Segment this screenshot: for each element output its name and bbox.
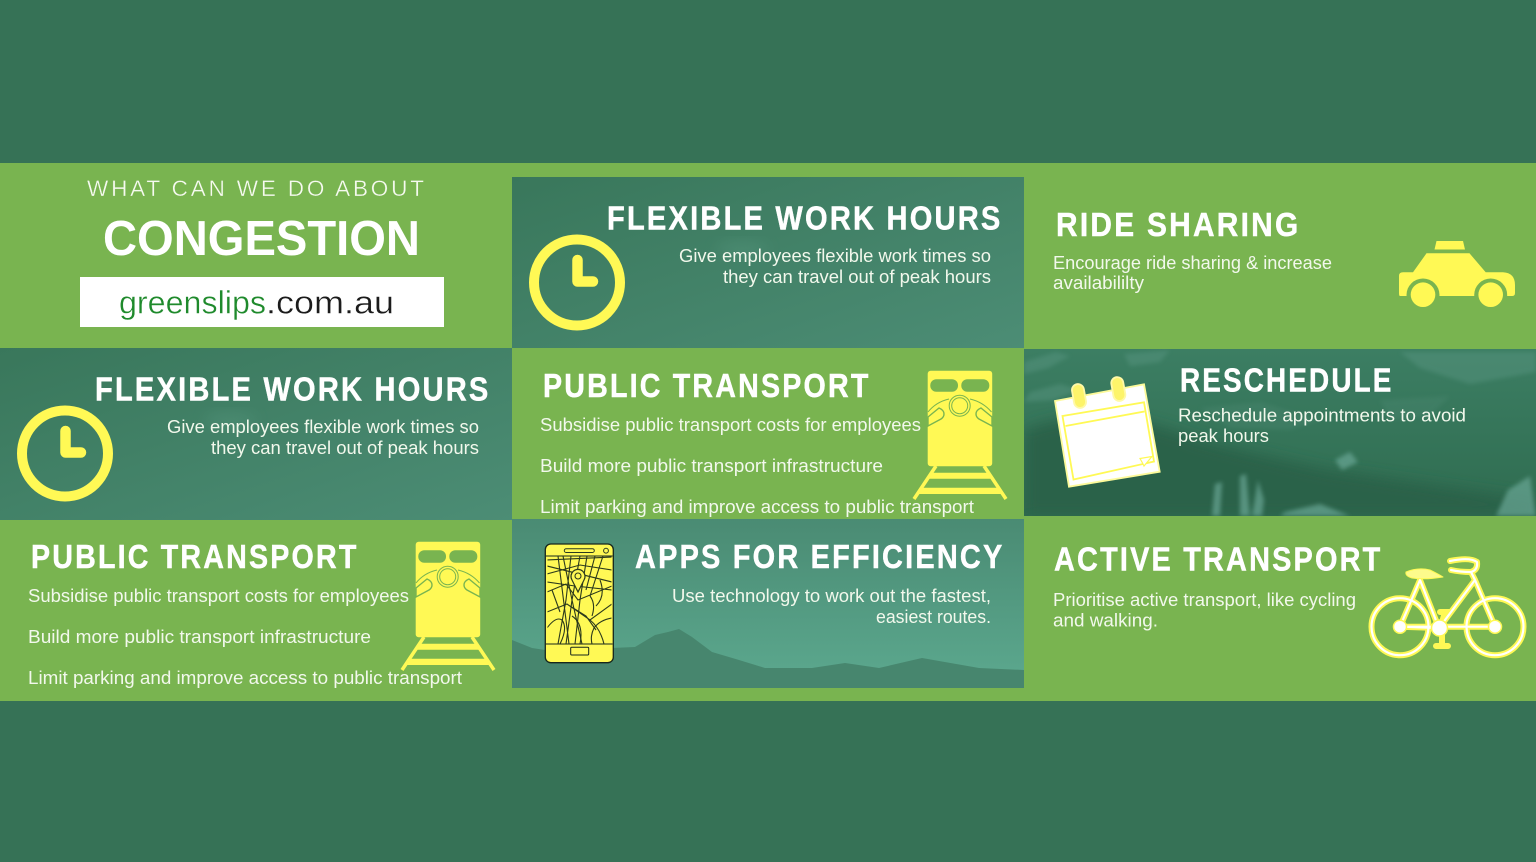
body text bbox=[1053, 253, 1332, 293]
body text: peak hours bbox=[1178, 426, 1269, 446]
icon: calendar bbox=[1055, 376, 1160, 487]
panel: public transport (left) bbox=[28, 538, 494, 688]
logo box bbox=[80, 277, 444, 327]
body text: Encourage ride sharing & increase bbox=[1053, 253, 1332, 273]
body text: easiest routes. bbox=[876, 607, 991, 627]
body text: Build more public transport infrastructure bbox=[28, 627, 371, 647]
heading: RIDE SHARING bbox=[1056, 206, 1300, 243]
panel: apps for efficiency bbox=[512, 519, 1024, 688]
heading: RESCHEDULE bbox=[1180, 362, 1394, 398]
logo box: greenslips bbox=[119, 284, 266, 320]
body text: Reschedule appointments to avoid bbox=[1178, 406, 1466, 426]
body text bbox=[672, 586, 991, 627]
body text: Subsidise public transport costs for employees bbox=[540, 415, 921, 435]
heading: FLEXIBLE WORK HOURS bbox=[607, 200, 1002, 236]
body text: and walking. bbox=[1053, 610, 1158, 630]
heading: FLEXIBLE WORK HOURS bbox=[95, 370, 490, 408]
icon: train bbox=[914, 371, 1006, 499]
panel: public transport (centre) bbox=[540, 367, 1006, 517]
body text bbox=[167, 417, 479, 458]
icon: phone with map bbox=[545, 544, 613, 663]
panel: active transport bbox=[1053, 540, 1524, 655]
heading: APPS FOR EFFICIENCY bbox=[635, 538, 1004, 575]
map pin bbox=[571, 569, 585, 592]
panel: flexible work hours (left) bbox=[0, 348, 512, 520]
panel: ride sharing bbox=[1053, 206, 1515, 312]
body text: they can travel out of peak hours bbox=[211, 438, 479, 458]
icon: clock bbox=[22, 410, 108, 496]
icon: train bbox=[402, 542, 494, 670]
body text: Prioritise active transport, like cycling bbox=[1053, 590, 1356, 610]
body text: Limit parking and improve access to public transport bbox=[28, 668, 462, 688]
heading: congestion: CONGESTION bbox=[103, 212, 420, 266]
body text bbox=[679, 246, 991, 287]
heading: ACTIVE TRANSPORT bbox=[1054, 540, 1382, 578]
mountains bbox=[512, 629, 1024, 688]
body text bbox=[540, 415, 974, 517]
body text: Limit parking and improve access to public transport bbox=[540, 497, 974, 517]
panel: flexible work hours (centre) bbox=[512, 177, 1024, 348]
green band bbox=[0, 163, 1536, 701]
body text: Subsidise public transport costs for employees bbox=[28, 586, 409, 606]
heading: PUBLIC TRANSPORT bbox=[543, 367, 870, 404]
body text: Use technology to work out the fastest, bbox=[672, 586, 991, 606]
body text bbox=[1053, 590, 1356, 630]
body text: Give employees flexible work times so bbox=[167, 417, 479, 437]
body text: Give employees flexible work times so bbox=[679, 246, 991, 266]
body text bbox=[28, 586, 462, 688]
panel: title bbox=[80, 176, 444, 327]
body text: Build more public transport infrastructure bbox=[540, 456, 883, 476]
panel: reschedule bbox=[1024, 349, 1536, 516]
body text bbox=[1178, 406, 1466, 446]
photo texture bbox=[1024, 350, 1536, 516]
icon: bicycle bbox=[1372, 559, 1524, 655]
icon: car bbox=[1399, 241, 1515, 312]
body text: they can travel out of peak hours bbox=[723, 267, 991, 287]
logo box: .com.au bbox=[266, 284, 394, 320]
heading: PUBLIC TRANSPORT bbox=[31, 538, 358, 575]
heading: what can we do about: WHAT CAN WE DO ABOUT bbox=[87, 176, 424, 201]
body text: availabililty bbox=[1053, 273, 1144, 293]
icon: clock bbox=[534, 240, 620, 326]
